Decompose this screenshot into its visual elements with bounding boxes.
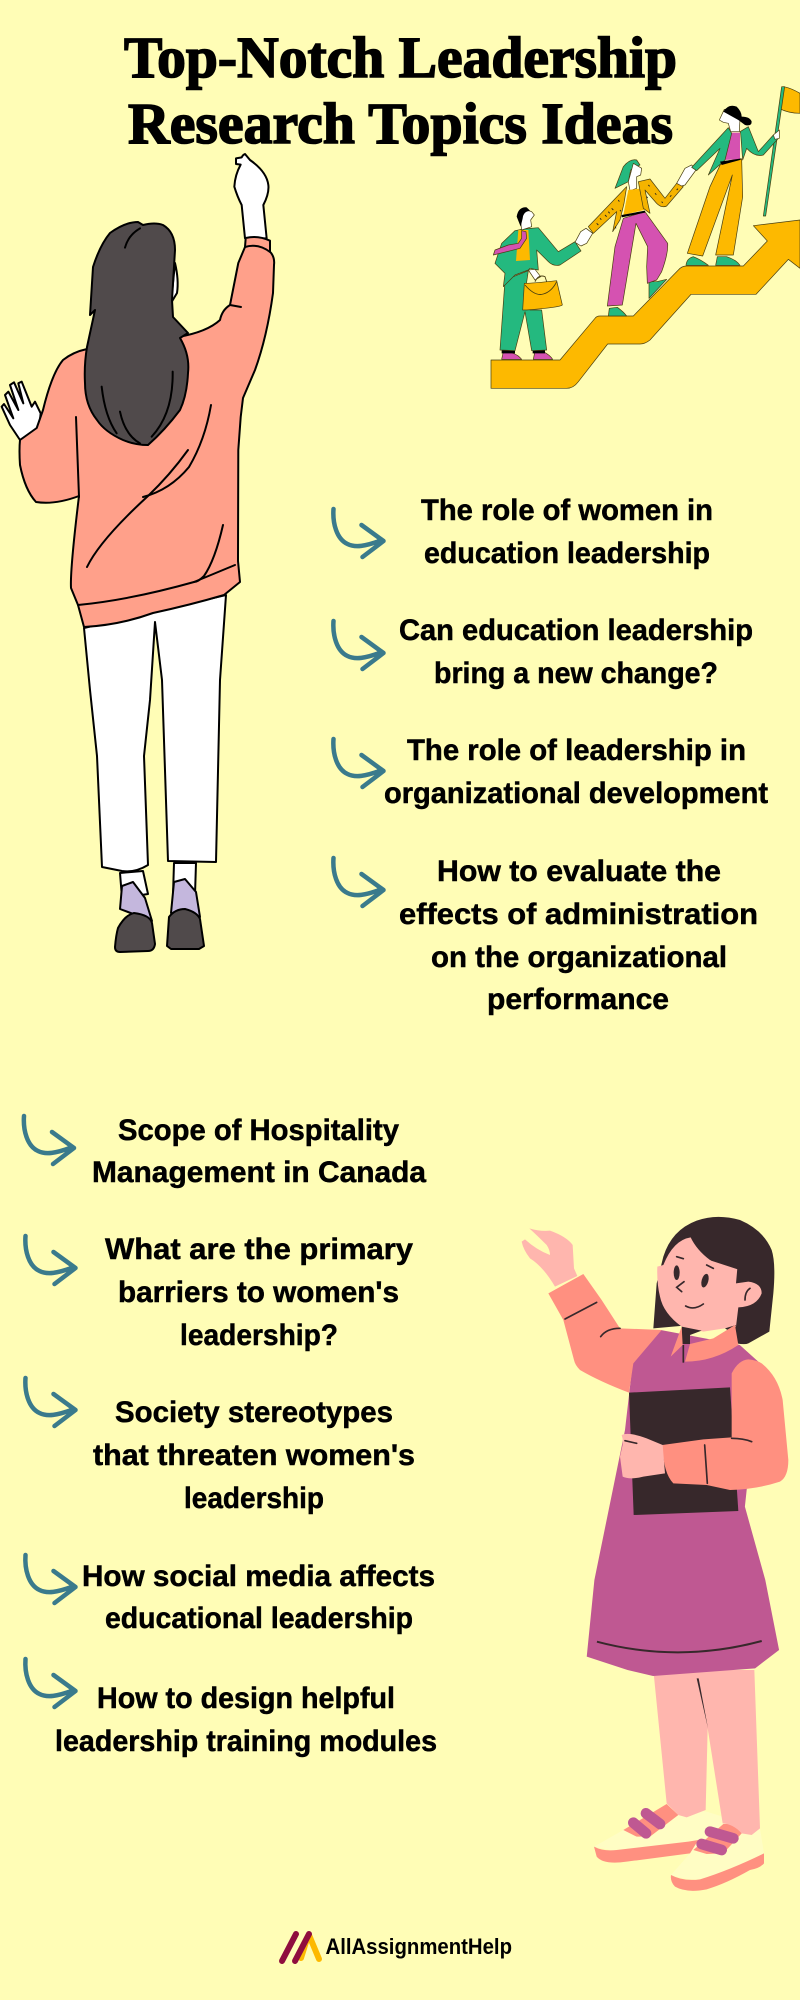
topic 2	[333, 614, 753, 690]
topic 5: Scope of Hospitality	[118, 1114, 399, 1147]
topic 3	[333, 734, 768, 810]
legs and shoes	[594, 1670, 764, 1891]
figure: woman with flag	[686, 106, 779, 265]
arrow icon	[25, 1378, 75, 1426]
sweater	[20, 237, 274, 627]
topic 3: The role of leadership in	[407, 734, 746, 767]
hair	[85, 222, 188, 445]
illustration: team climbing stair arrow	[491, 87, 800, 388]
hair	[653, 1217, 774, 1344]
title	[124, 25, 677, 156]
raised hand	[522, 1228, 577, 1287]
topic 4: performance	[487, 983, 669, 1016]
front hand	[620, 1434, 665, 1478]
topic 8: educational leadership	[105, 1602, 413, 1635]
lowered white hand	[2, 382, 41, 440]
topic 2: Can education leadership	[399, 614, 753, 647]
arrow icon	[24, 1116, 74, 1164]
topic 9: leadership training modules	[55, 1725, 437, 1758]
topic 9	[25, 1659, 437, 1758]
topic 5	[24, 1114, 426, 1189]
topic 8	[25, 1555, 435, 1635]
clipboard	[629, 1387, 738, 1515]
figure: woman in yellow jacket	[588, 160, 696, 316]
shoe uppers	[594, 1805, 764, 1880]
figure: man with bag	[493, 207, 593, 359]
illustration: woman holding clipboard	[522, 1217, 788, 1891]
upper body	[522, 1217, 788, 1515]
topic 6: leadership?	[180, 1319, 338, 1352]
right foot	[167, 863, 204, 949]
arrow icon	[333, 858, 384, 906]
near arm	[662, 1359, 788, 1490]
shoe straps	[633, 1813, 733, 1850]
shoe soles	[594, 1840, 764, 1891]
arm lines	[565, 1302, 620, 1337]
topic 8: How social media affects	[82, 1560, 435, 1593]
topic 6: What are the primary	[105, 1233, 413, 1266]
arrow icon	[333, 621, 384, 669]
arrow icon	[25, 1555, 75, 1603]
hair strands	[102, 228, 173, 443]
sweater creases	[76, 246, 270, 605]
white sliver by hair	[171, 263, 178, 303]
topic 1: education leadership	[424, 537, 710, 570]
stair arrow	[491, 220, 800, 388]
topic 3: organizational development	[384, 777, 768, 810]
arrow icon	[25, 1236, 75, 1284]
face	[657, 1237, 762, 1332]
topic 4: How to evaluate the	[437, 855, 721, 888]
arrow icon	[25, 1659, 75, 1707]
arrow icon	[333, 509, 384, 557]
legs	[653, 1670, 760, 1835]
topic 1	[333, 494, 713, 570]
raised white hand	[234, 154, 268, 238]
topic 4	[333, 855, 758, 1016]
topic 6	[25, 1233, 413, 1352]
logo mark	[282, 1934, 319, 1961]
topic 4: effects of administration	[399, 898, 758, 931]
topic 1: The role of women in	[421, 494, 713, 527]
topic 7: leadership	[184, 1482, 324, 1515]
arrow icon	[333, 739, 384, 787]
topic 4: on the organizational	[431, 941, 727, 974]
left foot	[115, 871, 155, 952]
topic 2: bring a new change?	[434, 657, 718, 690]
dress	[587, 1330, 779, 1676]
title: Top-Notch Leadership	[124, 25, 677, 90]
topic 5: Management in Canada	[92, 1156, 426, 1189]
topic 7: Society stereotypes	[115, 1396, 393, 1429]
skirt hem line	[597, 1641, 762, 1652]
cuff lines	[625, 1438, 752, 1483]
flag and pole	[763, 87, 800, 216]
topic 6: barriers to women's	[118, 1276, 399, 1309]
topic 7	[25, 1378, 415, 1515]
title: Research Topics Ideas	[128, 91, 673, 156]
shoe collars	[623, 1804, 742, 1854]
illustration: woman seen from behind	[2, 154, 274, 952]
topic 9: How to design helpful	[97, 1682, 395, 1715]
pants	[84, 595, 226, 871]
raised arm	[548, 1274, 662, 1393]
leg crease	[697, 1678, 708, 1728]
collar	[671, 1325, 738, 1363]
logo: AllAssignmentHelp	[326, 1934, 512, 1959]
topic 7: that threaten women's	[93, 1439, 415, 1472]
